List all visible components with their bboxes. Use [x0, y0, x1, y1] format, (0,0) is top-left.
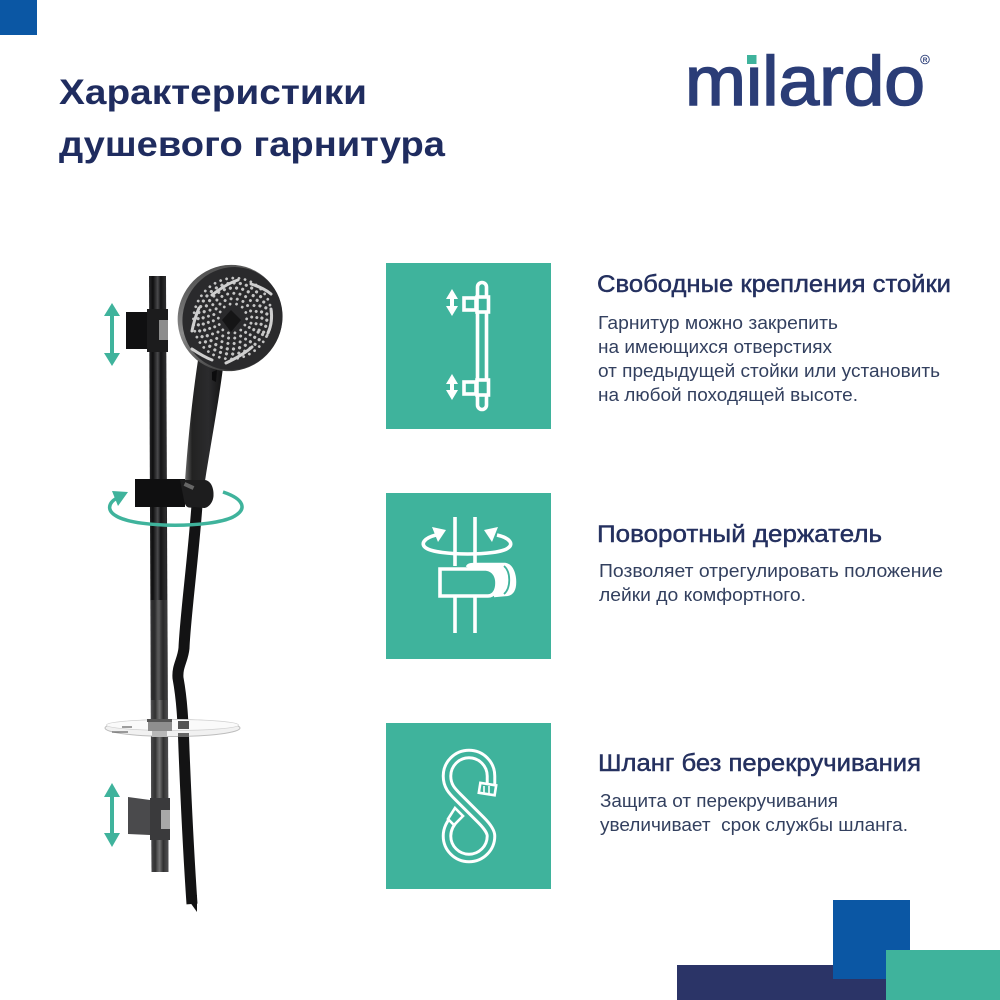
corner blocks: bottom right — [677, 900, 1000, 1000]
rotating holder — [135, 479, 214, 508]
panel: icon 3 anti-twist hose — [386, 723, 551, 889]
corner square: top left — [0, 0, 37, 35]
lower rail highlight — [150, 600, 168, 872]
text block: anti-twist hose — [600, 790, 908, 835]
arrow: bottom vertical adjustment — [104, 783, 120, 847]
icon: rail with brackets — [446, 282, 488, 410]
top wall bracket — [126, 309, 168, 352]
title: душевого гарнитура — [59, 125, 446, 164]
heading: free mounts: Свободные крепления стойки — [597, 271, 951, 298]
text block: anti-twist hose: увеличивает срок службы шланга. — [600, 814, 908, 835]
title: Характеристики — [59, 73, 367, 112]
heading: anti-twist hose: Шланг без перекручивания — [598, 750, 921, 777]
text block: free mounts: Гарнитур можно закрепить — [598, 312, 838, 333]
title — [59, 73, 446, 164]
arrow: rotation around rail — [110, 491, 242, 525]
text block: free mounts — [598, 312, 940, 405]
icon: rotating holder — [423, 517, 515, 633]
spray slots — [192, 280, 272, 363]
text block: rotating holder: Позволяет отрегулировать положение — [599, 560, 943, 581]
handle — [185, 360, 224, 481]
soap shelf — [105, 719, 240, 737]
hand shower head — [159, 246, 301, 390]
text block: rotating holder — [599, 560, 943, 605]
bottom wall bracket — [128, 797, 170, 840]
text block: rotating holder: лейки до комфортного. — [599, 584, 806, 605]
arrow: top vertical adjustment — [104, 303, 120, 366]
panel: icon 2 rotating holder — [386, 493, 551, 659]
text block: free mounts: на имеющихся отверстиях — [598, 336, 833, 357]
panel: icon 1 rail mounts — [386, 263, 551, 429]
product: shower set — [105, 246, 301, 912]
text block: anti-twist hose: Защита от перекручивания — [600, 790, 838, 811]
text block: free mounts: от предыдущей стойки или установить — [598, 360, 940, 381]
text block: free mounts: на любой походящей высоте. — [598, 384, 858, 405]
heading: rotating holder: Поворотный держатель — [597, 521, 882, 548]
slide rail — [149, 276, 168, 872]
logo: milardo: R — [923, 57, 928, 64]
hose — [178, 505, 197, 904]
logo: milardo: milardo — [685, 42, 925, 120]
icon: s-shaped hose — [447, 754, 496, 858]
